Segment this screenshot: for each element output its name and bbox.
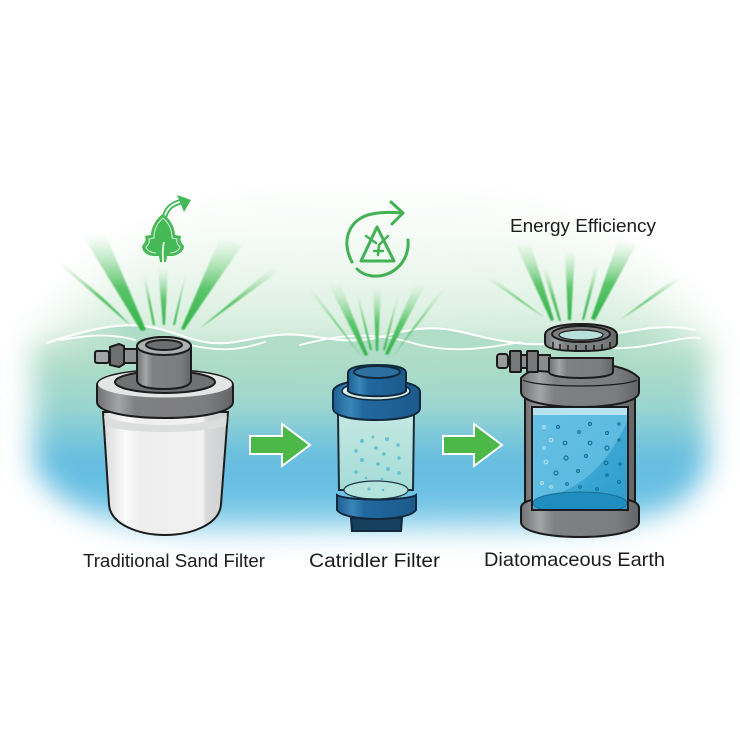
icon: leaf with arrow (142, 195, 191, 262)
arrow: sand to cartridge (250, 424, 310, 466)
background: green haze above water (45, 190, 700, 370)
diatomaceous earth filter (497, 324, 639, 537)
DE bottom flange (521, 500, 639, 537)
sand filter (95, 337, 233, 535)
DE water window (532, 407, 628, 510)
DE frame (525, 395, 635, 507)
background: water gradient band (34, 340, 708, 532)
label: diatomaceous earth: Diatomaceous Earth (484, 549, 665, 571)
cartridge top collar (348, 365, 406, 396)
rays above sand filter (58, 233, 279, 331)
rays above cartridge filter (308, 283, 445, 357)
rays above DE filter (486, 240, 680, 321)
arrow: cartridge to DE (443, 424, 502, 466)
DE dome cap (521, 363, 639, 407)
cartridge filter (333, 365, 420, 531)
icon: recycle arrow with triangle (347, 202, 408, 276)
heading: energy efficiency: Energy Efficiency (510, 216, 656, 236)
cartridge lower flange (337, 495, 416, 519)
sand filter pipe (95, 344, 140, 367)
DE bubbles (540, 422, 621, 490)
cartridge glass (338, 414, 414, 490)
cartridge upper flange (333, 380, 420, 420)
water surface waves (47, 325, 700, 349)
sand filter body (103, 412, 228, 535)
label: cartridge filter: Catridler Filter (309, 551, 441, 572)
DE threaded ring (545, 324, 617, 351)
cartridge lower nut (351, 518, 402, 531)
background: teal water below the wave (62, 326, 685, 360)
DE neck (549, 358, 613, 378)
sand filter neck (137, 337, 191, 389)
cartridge bubbles (354, 436, 401, 491)
label: traditional sand filter: Traditional Sand Filter (83, 551, 265, 571)
DE pipe (497, 351, 552, 372)
sand filter rim (97, 370, 233, 418)
